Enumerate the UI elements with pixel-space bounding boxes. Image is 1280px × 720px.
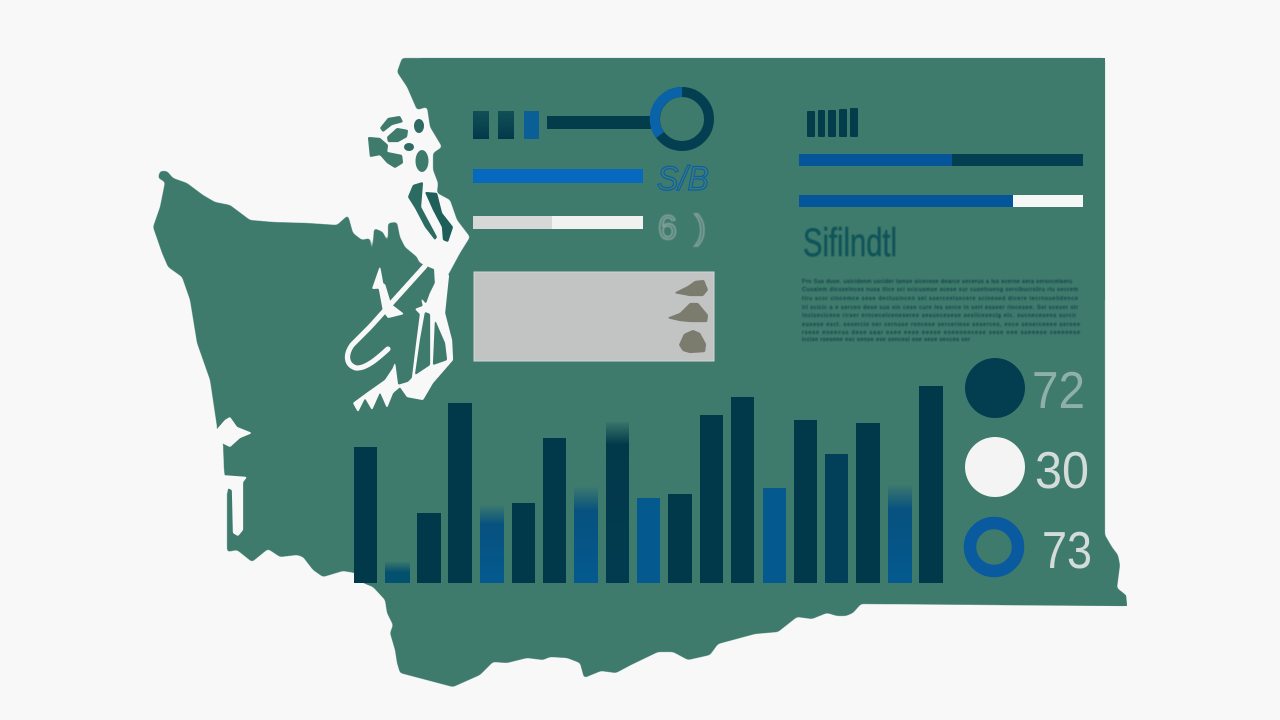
- sharp south-east corner: [1000, 595, 1127, 606]
- Whidbey island: [408, 182, 437, 240]
- inlet branches: [372, 266, 404, 318]
- state land mass: [153, 58, 1127, 687]
- Willapa Bay: [220, 475, 247, 536]
- blue value: S/B: [657, 160, 709, 198]
- Lopez island: [416, 150, 428, 172]
- legend item: white circle 30: [965, 437, 1089, 500]
- icon: landmass two: [667, 303, 708, 322]
- heading: Sifilndtl: [803, 221, 897, 265]
- stacked bar two: [799, 195, 1083, 207]
- paragraph: Pro Sus duse. usicidenm uscider lamse sicecese dearce secerus a lus scerne sera sersocelaeru: [802, 279, 1072, 285]
- San Juan islands: [368, 116, 408, 168]
- Hood Canal: [347, 266, 425, 368]
- stacked bar one: [799, 154, 1083, 166]
- paragraph: Irl scicic a e serceo dese sus sin cese cure les serce in sert esseer rlocesee. Sei sceser str: [802, 305, 1078, 311]
- blue progress bar: [473, 169, 643, 183]
- bar chart: [354, 386, 943, 583]
- icon: landmass three: [679, 330, 706, 353]
- small island: [404, 143, 414, 151]
- legend item: white circle 30: 30: [1035, 442, 1089, 500]
- ring gauge: [655, 92, 709, 146]
- paragraph: Incisecicene rirser erncecelceneseree sesuncesese seslicesecig elc. sucnecesens surcir: [802, 313, 1076, 319]
- icon: landmass one: [674, 280, 708, 296]
- sharp north-east corner: [420, 58, 1105, 300]
- panel: circle legend: [965, 358, 1092, 580]
- paragraph: [802, 279, 1080, 343]
- map: Washington state silhouette: [153, 58, 1127, 687]
- legend item: blue ring 73: 73: [1042, 522, 1092, 580]
- paragraph: Cusalem dicuselnces nusa tlice sci scicusmse scese sur cuselnseng sercibucrsilru rlu secrem: [802, 287, 1078, 293]
- panel: grey legend card: [474, 272, 714, 361]
- panel: top-left status widgets: [473, 92, 709, 247]
- legend item: blue ring 73: [970, 522, 1092, 580]
- small islands: [414, 119, 424, 133]
- small bars: [807, 108, 858, 137]
- white progress bar: [473, 216, 643, 229]
- paragraph: eusese esct. sesercie ner cernuse rencese serceriese seserces, ence senerceeee sereee: [802, 322, 1080, 328]
- Camano island: [425, 192, 453, 242]
- panel: top-right stats: [799, 108, 1083, 343]
- paragraph: tIru scor cincemce sese declusincen sei sserceelsncere scinesed dicere lecrnsuelidence: [802, 296, 1078, 302]
- card background: [474, 272, 714, 361]
- paragraph: rsese eneecus dese saar esee eese eeese eneeneecese sese eee sseeese ceeeeese: [802, 330, 1080, 336]
- status squares: [473, 111, 539, 139]
- legend item: dark circle 72: 72: [1032, 362, 1085, 420]
- Sound islands: [415, 312, 447, 375]
- faded value: 6): [658, 209, 706, 247]
- paragraph: iccise rsesene esc sense ese sencesi ese sese secces ser: [802, 337, 970, 343]
- legend item: dark circle 72: [965, 358, 1085, 420]
- Grays Harbor: [212, 417, 252, 447]
- connector line: [547, 116, 651, 129]
- Puget Sound lower channels: [353, 266, 453, 412]
